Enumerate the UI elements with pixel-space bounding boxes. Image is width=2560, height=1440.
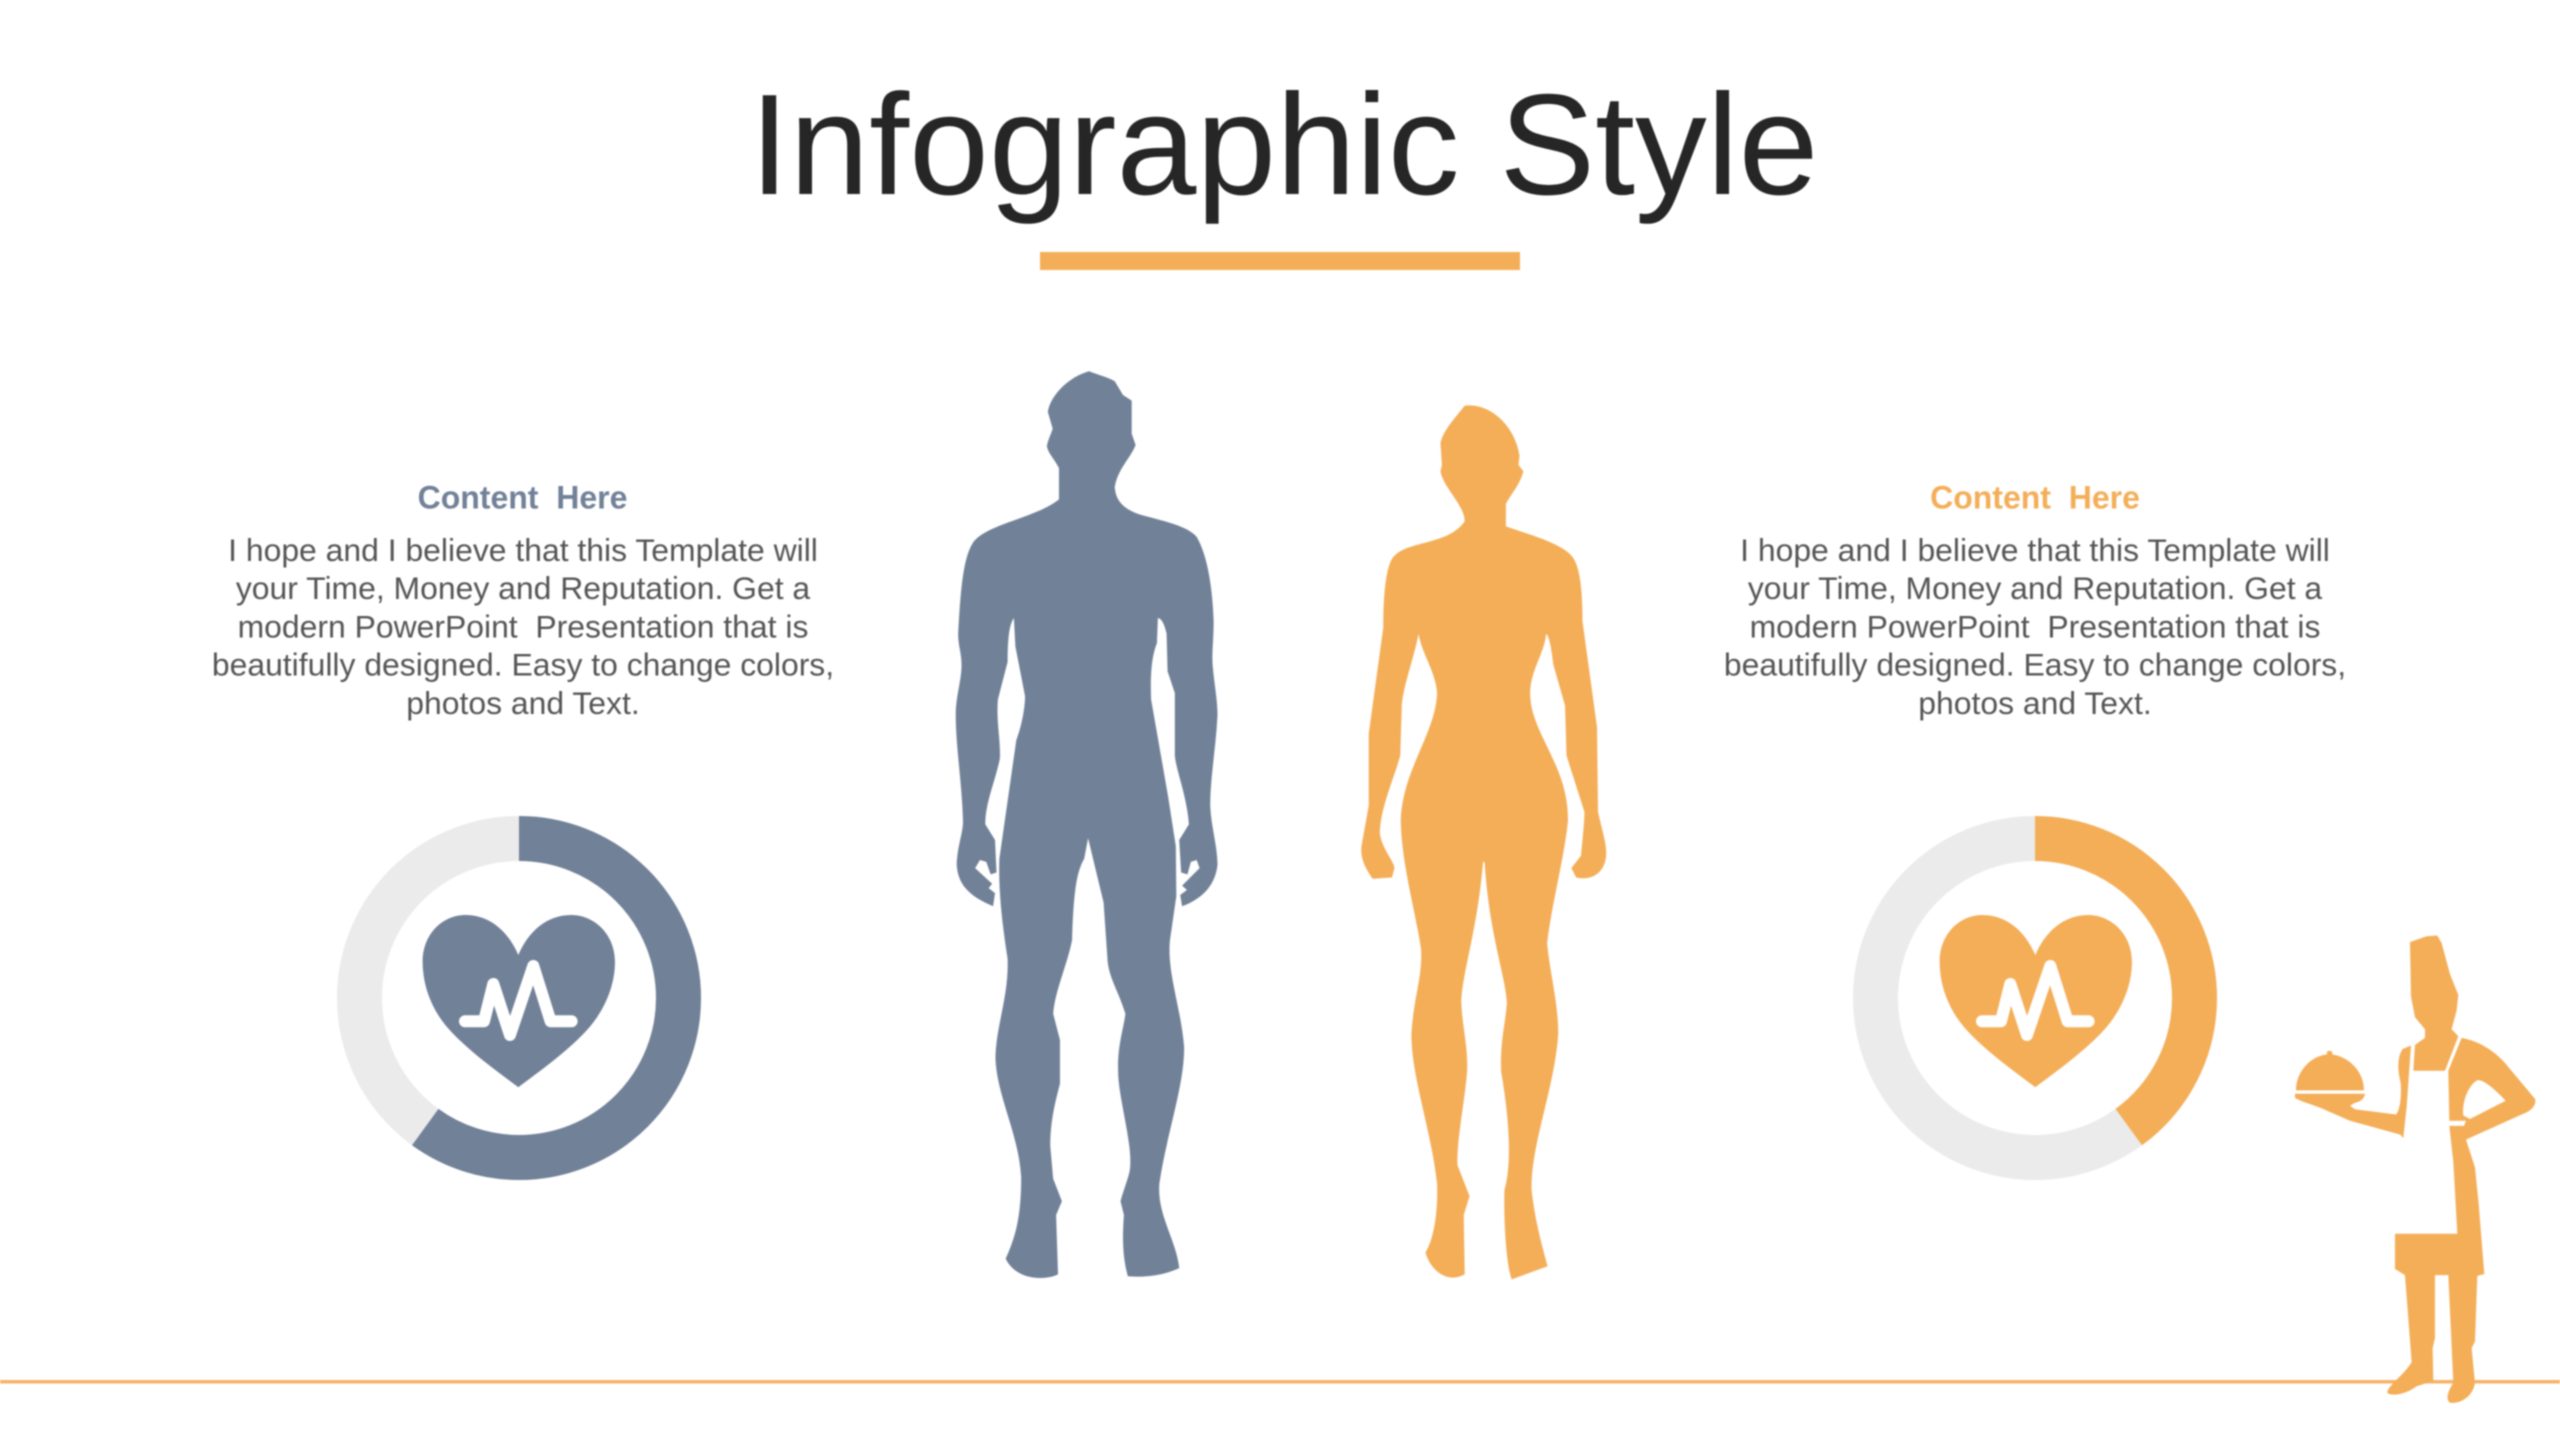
icon: heart with pulse, orange (1940, 915, 2132, 1087)
left body text: photos and Text. (406, 685, 640, 721)
left body text: I hope and I believe that this Template will (228, 532, 818, 568)
panel: right text (1724, 480, 2346, 721)
icon: female silhouette (1361, 405, 1606, 1279)
icon: chef carrying a cloche (2295, 936, 2535, 1403)
right heading: Content Here (1930, 480, 2140, 516)
left body text: modern PowerPoint Presentation that is (238, 608, 808, 644)
panel: left text (212, 480, 834, 721)
title underline (1040, 252, 1520, 270)
donut chart: left 60 percent (360, 838, 678, 1158)
left body text: your Time, Money and Reputation. Get a (236, 570, 810, 606)
right body text: photos and Text. (1918, 685, 2152, 721)
title: Infographic Style (750, 65, 1818, 225)
ground line (0, 1380, 2560, 1384)
donut chart: right 40 percent (1876, 838, 2194, 1158)
icon: heart with pulse, slate (423, 915, 615, 1087)
right body text: beautifully designed. Easy to change colors, (1724, 646, 2346, 682)
left heading: Content Here (418, 480, 627, 516)
right body text: modern PowerPoint Presentation that is (1750, 608, 2320, 644)
left body text: beautifully designed. Easy to change colors, (212, 646, 834, 682)
right body text: I hope and I believe that this Template will (1740, 532, 2330, 568)
icon: male silhouette (956, 371, 1217, 1278)
right body text: your Time, Money and Reputation. Get a (1748, 570, 2322, 606)
